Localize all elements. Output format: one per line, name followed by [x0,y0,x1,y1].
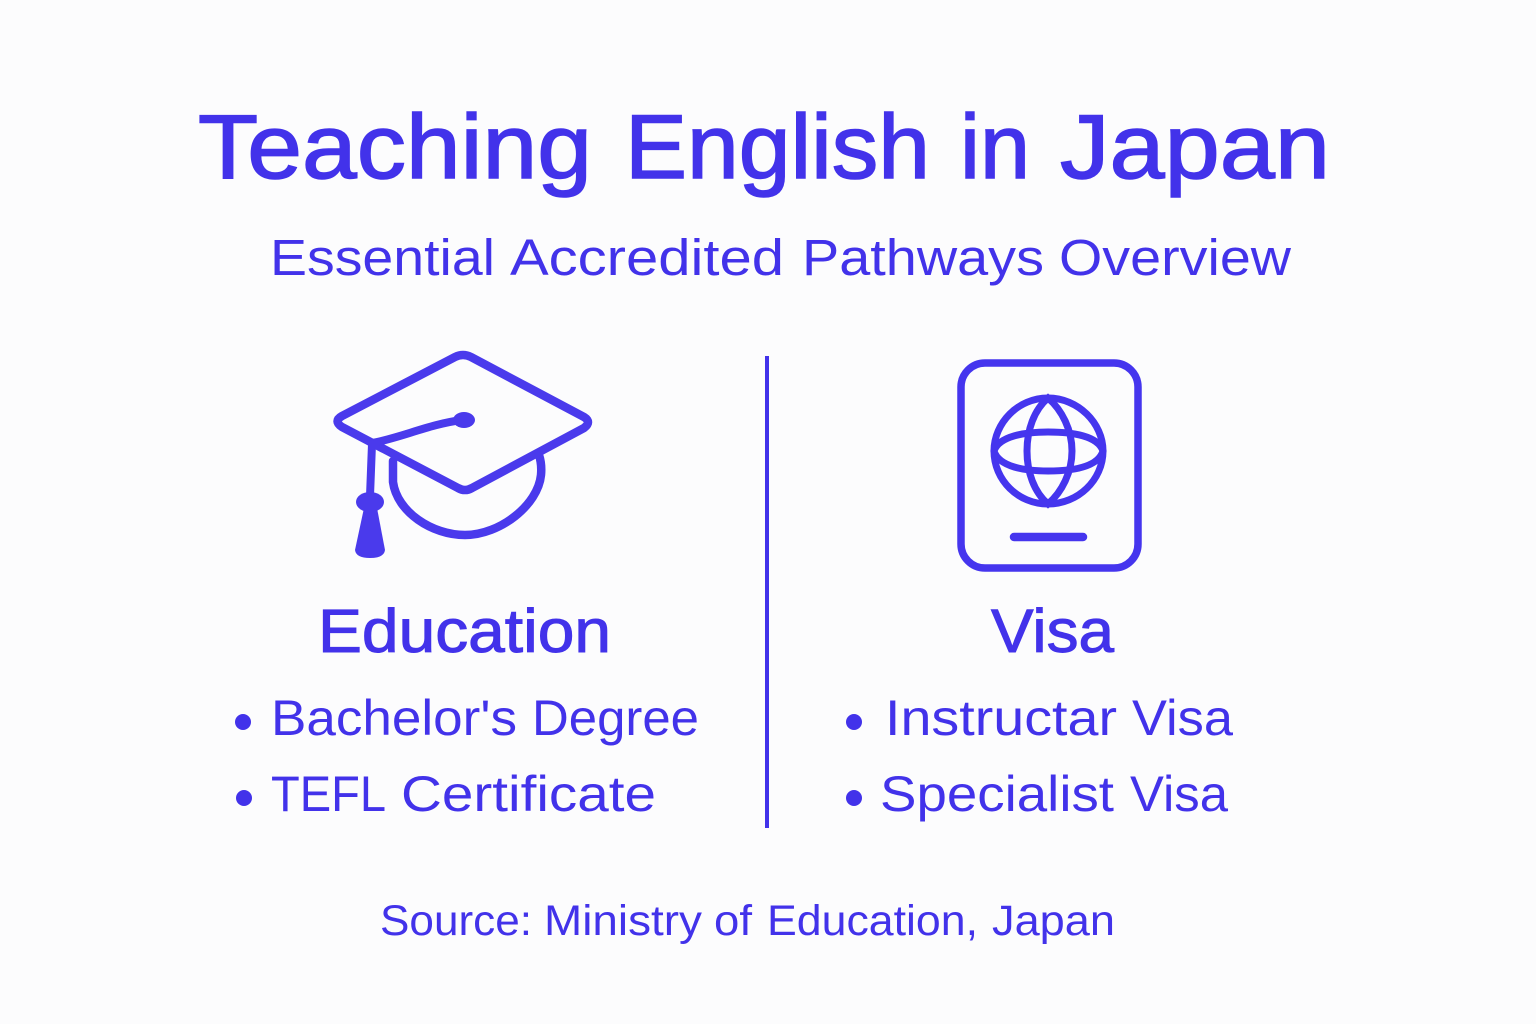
title: Teaching [198,97,592,198]
heading: Education: Education [318,597,611,665]
title: Japan [1060,97,1330,198]
subtitle: Accredited [510,229,784,286]
bullet: Bachelor's Degree [235,714,251,730]
item: TEFL Certificate [271,766,656,822]
title [198,97,1330,198]
subtitle: Overview [1059,229,1291,286]
subtitle: Pathways [802,229,1044,286]
source note [380,897,1115,945]
source note: Education, [767,897,978,945]
source note: of [714,897,753,945]
bullet: Specialist Visa [846,790,862,806]
source note: Japan [992,897,1115,945]
bullet: TEFL Certificate [236,790,252,806]
source note: Ministry [544,897,703,945]
icon: graduation cap [338,355,588,558]
list: visa [846,690,1233,822]
title: English [625,97,930,198]
item: Specialist Visa: Visa [1130,766,1228,822]
bullet: Instructar Visa [846,714,862,730]
item: Bachelor's Degree [271,690,699,746]
icon: passport with globe [961,363,1138,568]
item: Instructar Visa [885,690,1233,746]
item: Bachelor's Degree: Degree [532,690,699,746]
subtitle: Essential [270,229,495,286]
item: Instructar Visa: Visa [1132,690,1233,746]
item: Instructar Visa: Instructar [885,690,1117,746]
source note: Source: [380,897,532,945]
item: Bachelor's Degree: Bachelor's [271,690,517,746]
item: TEFL Certificate: TEFL [271,766,386,822]
divider [765,356,769,828]
item: TEFL Certificate: Certificate [401,766,656,822]
title: in [960,97,1030,198]
item: Specialist Visa [880,766,1228,822]
item: Specialist Visa: Specialist [880,766,1114,822]
list: education [235,690,699,822]
subtitle [270,229,1291,286]
heading: Visa: Visa [991,597,1114,665]
